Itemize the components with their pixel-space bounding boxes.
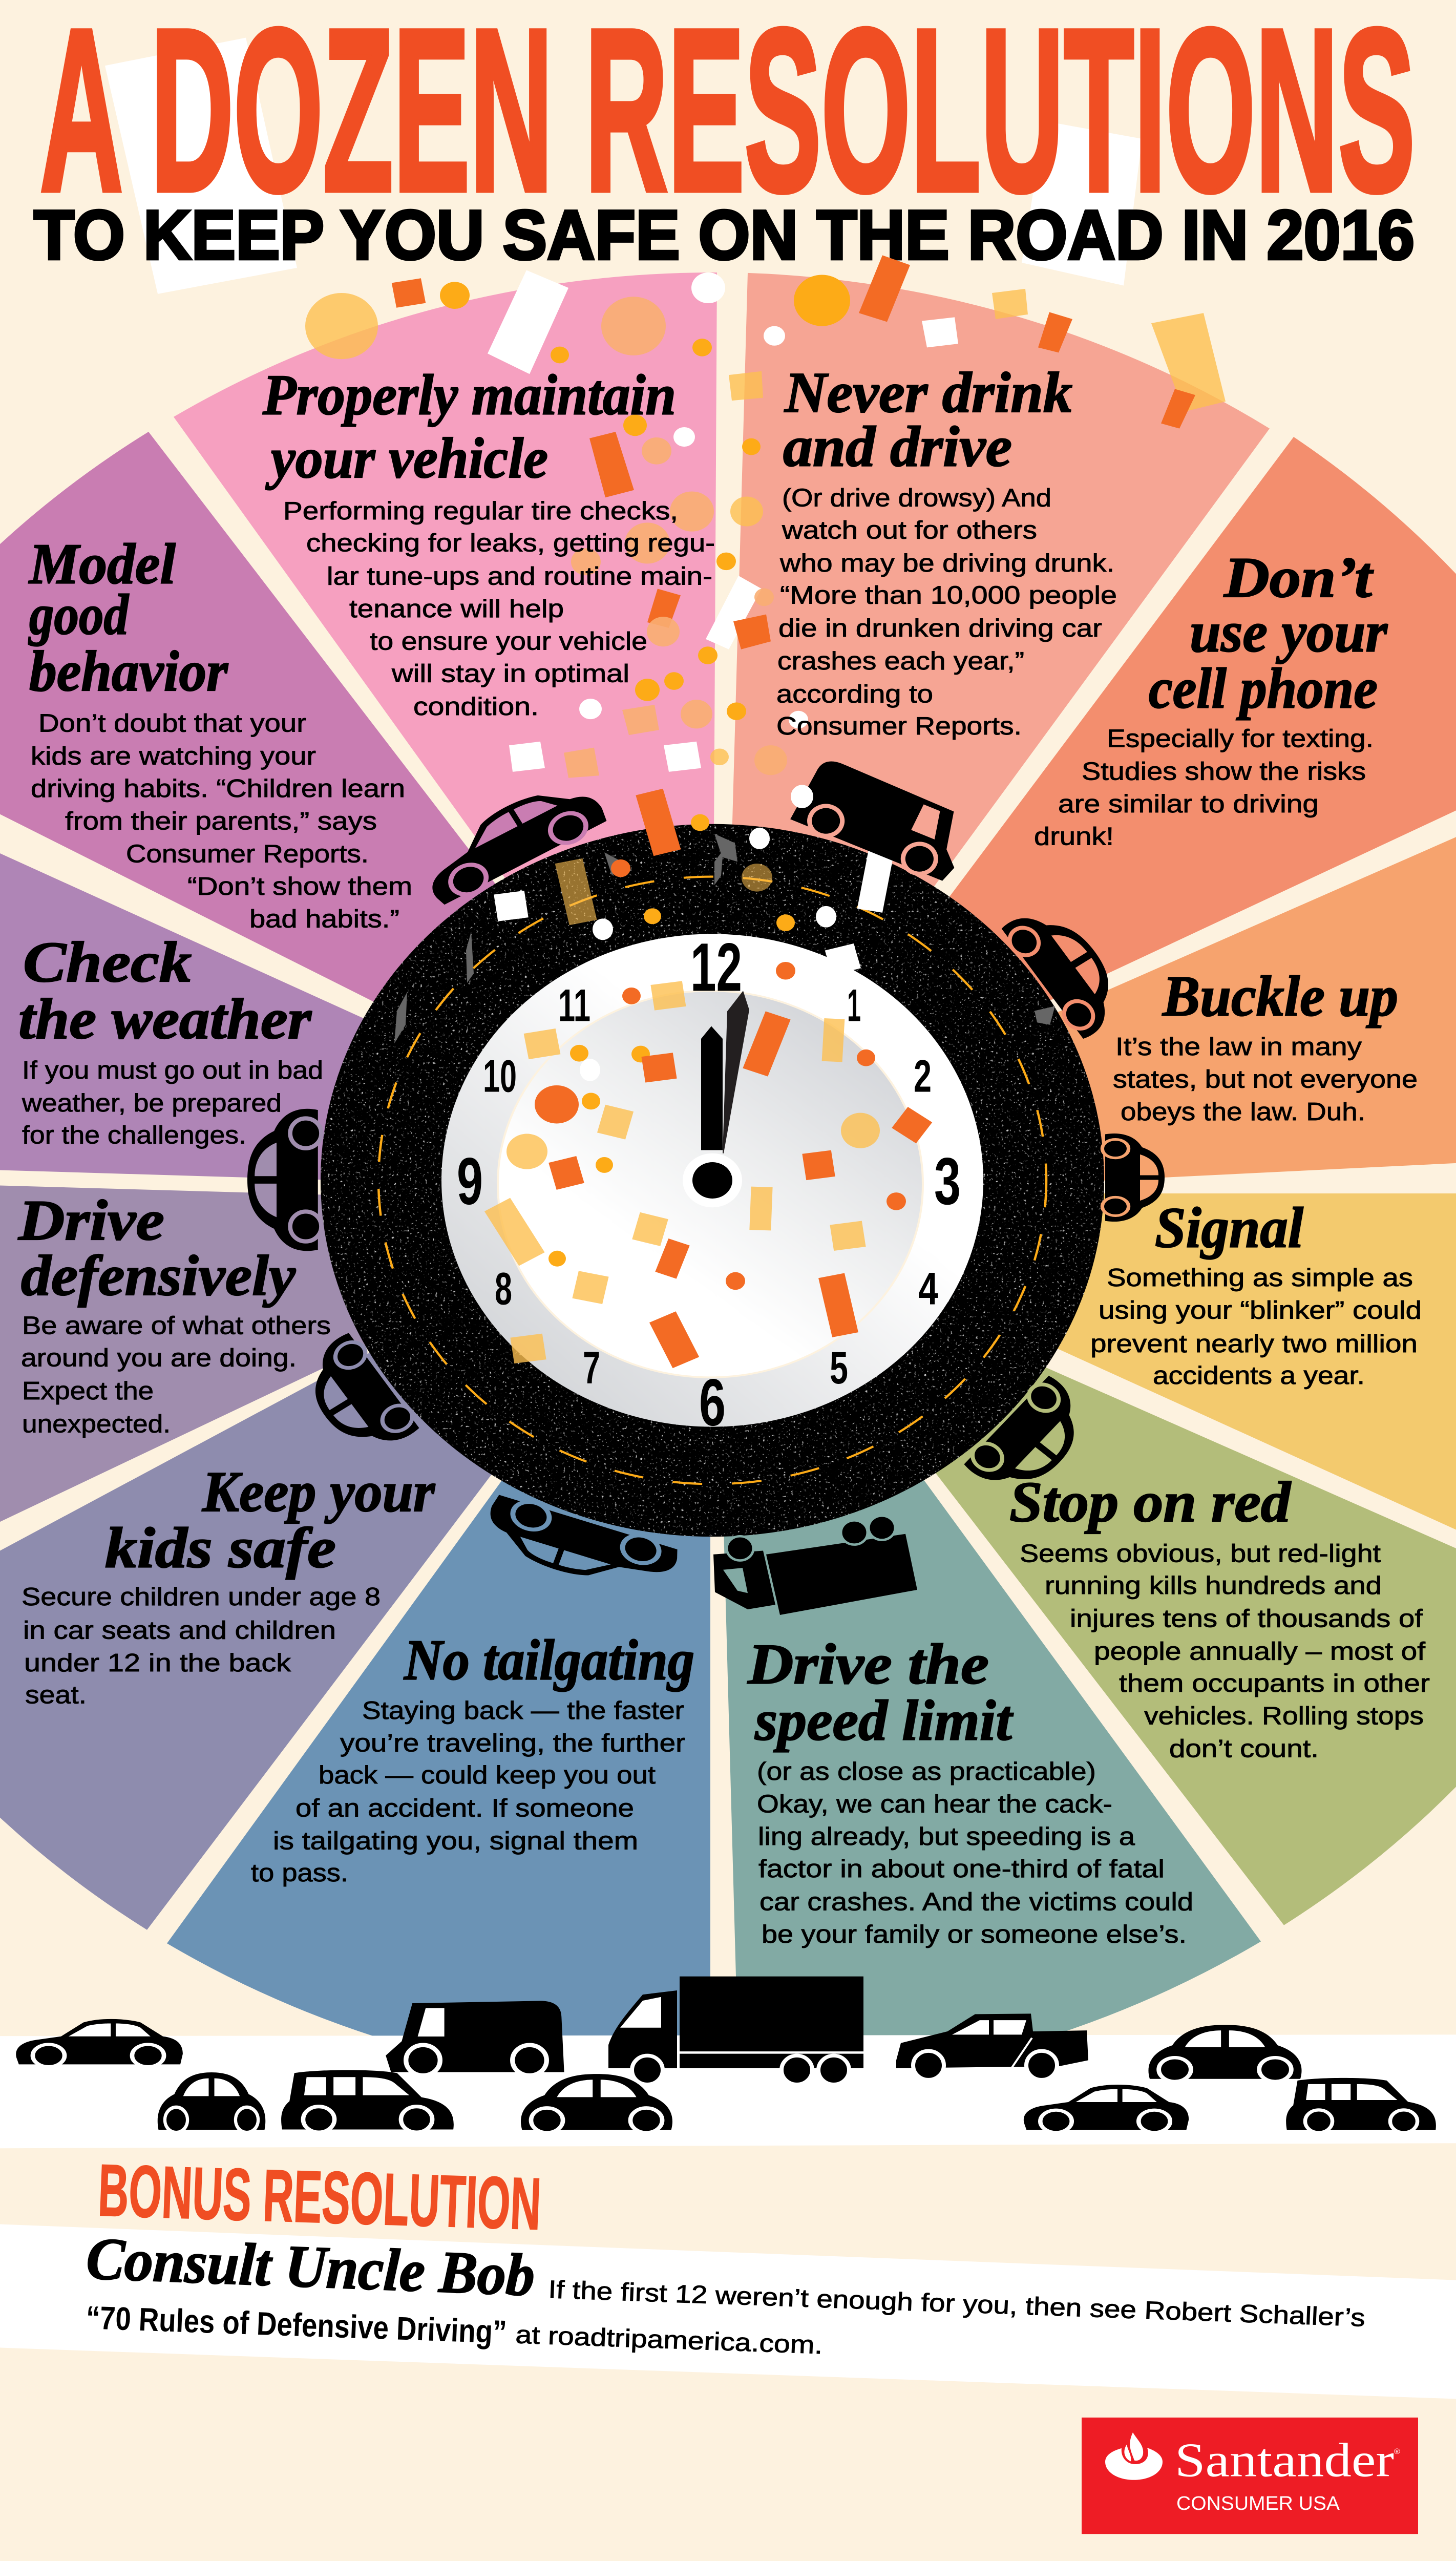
clock numerals: 9 <box>457 1144 483 1218</box>
panel: don't use your cell phone <box>1034 545 1388 850</box>
bonus resolution heading: BONUS RESOLUTION <box>97 2149 542 2245</box>
icon: box truck <box>608 1977 863 2085</box>
wedge: never drink and drive <box>729 273 1270 932</box>
panel: check the weather <box>18 930 323 1149</box>
body text: Staying back — the faster <box>362 1696 684 1724</box>
clock numerals: 8 <box>495 1263 512 1314</box>
wedge: stop on red <box>901 1347 1456 1925</box>
body text <box>1090 1263 1422 1389</box>
clock face <box>441 934 983 1427</box>
body text: them occupants in other <box>1119 1669 1430 1697</box>
bonus text: “70 Rules of Defensive Driving” <box>85 2299 508 2350</box>
heading <box>18 1188 296 1308</box>
icon: sedan <box>16 2019 183 2067</box>
wedge: maintain your vehicle <box>174 272 717 932</box>
body text: don’t count. <box>1169 1734 1319 1762</box>
wedge: no tailgating <box>167 1421 710 2089</box>
body text: Seems obvious, but red-light <box>1020 1539 1381 1567</box>
body text: from their parents,” says <box>65 807 377 835</box>
clock numerals: 1 <box>847 980 861 1031</box>
clock numerals: 5 <box>830 1342 848 1393</box>
body text: you’re traveling, the further <box>340 1729 685 1757</box>
panel: no tailgating <box>251 1628 694 1887</box>
heading: Check <box>23 930 192 994</box>
bonus text: If the first 12 weren’t enough for you, then see Robert Schaller’s <box>548 2275 1366 2332</box>
body text: bad habits.” <box>249 905 399 933</box>
body text: watch out for others <box>782 516 1037 544</box>
clock numerals: 7 <box>583 1342 600 1393</box>
body text: is tailgating you, signal them <box>273 1827 638 1855</box>
body text: will stay in optimal <box>391 659 629 687</box>
bonus heading: consult uncle bob: Consult Uncle Bob <box>85 2226 536 2308</box>
icon: white confetti on van <box>791 785 813 808</box>
body text <box>1020 1539 1430 1762</box>
heading <box>18 930 312 1051</box>
icon: SUV <box>281 2070 454 2132</box>
bonus white band <box>0 2224 1456 2399</box>
body text: using your “blinker” could <box>1099 1296 1422 1324</box>
icon: small car, buckle up <box>1102 1133 1165 1222</box>
title backing shapes <box>105 38 1142 294</box>
white road band <box>0 2034 1456 2148</box>
heading <box>1149 545 1388 720</box>
body text: in car seats and children <box>23 1616 336 1644</box>
body text: to pass. <box>251 1858 348 1887</box>
body text: checking for leaks, getting regu- <box>306 529 715 557</box>
heading: Buckle up <box>1162 964 1398 1028</box>
body text: drunk! <box>1034 822 1114 850</box>
body text: It’s the law in many <box>1115 1032 1362 1060</box>
wordmark: Santander <box>1175 2433 1394 2487</box>
body text: back — could keep you out <box>319 1760 656 1789</box>
wedge: buckle up <box>1045 837 1456 1183</box>
confetti <box>305 255 1226 1368</box>
body text: states, but not everyone <box>1113 1065 1418 1093</box>
body text: driving habits. “Children learn <box>31 774 405 802</box>
clock numerals: 6 <box>699 1365 726 1439</box>
body text: tenance will help <box>349 594 564 622</box>
icon: pickup <box>896 2013 1088 2080</box>
body text: kids are watching your <box>31 742 316 770</box>
bonus text: at roadtripamerica.com. <box>515 2320 823 2359</box>
heading: Don’t <box>1223 545 1374 610</box>
body text: running kills hundreds and <box>1045 1571 1382 1600</box>
heading: defensively <box>21 1243 296 1308</box>
body text <box>251 1696 685 1887</box>
body text: Something as simple as <box>1107 1263 1413 1291</box>
heading: cell phone <box>1149 656 1378 720</box>
icon: hatchback on road <box>998 896 1136 1041</box>
heading: speed limit <box>754 1688 1014 1752</box>
body text: Consumer Reports. <box>776 711 1022 740</box>
panel: model good behavior <box>28 532 412 933</box>
icon: compact right <box>1148 2025 1302 2082</box>
wedge: speed limit <box>720 1397 1261 2089</box>
icon: hatchback <box>158 2072 265 2133</box>
wedge: drive defensively <box>0 1185 410 1522</box>
body text: prevent nearly two million <box>1090 1329 1418 1358</box>
body text <box>1113 1032 1418 1126</box>
wedge: signal <box>999 1193 1456 1530</box>
body text: vehicles. Rolling stops <box>1144 1702 1424 1730</box>
heading <box>105 1459 435 1580</box>
body text: people annually – most of <box>1094 1637 1426 1665</box>
icon: truck upside down <box>713 1516 917 1615</box>
body text: Studies show the risks <box>1082 757 1366 785</box>
heading: Signal <box>1155 1195 1303 1259</box>
traffic row of vehicles <box>16 1977 1436 2133</box>
heading: Drive <box>18 1188 164 1252</box>
wedge: cell phone <box>935 437 1456 1003</box>
panel: keep your kids safe <box>22 1459 435 1709</box>
clock numerals: 3 <box>934 1144 961 1218</box>
heading: No tailgating <box>403 1628 694 1692</box>
heading: Model <box>28 532 176 596</box>
heading: Properly maintain <box>262 363 676 427</box>
heading: kids safe <box>105 1515 336 1580</box>
panel: never drink and drive <box>776 360 1117 740</box>
body text: factor in about one-third of fatal <box>758 1854 1165 1882</box>
heading <box>28 532 228 703</box>
icon: car on road, model behavior <box>410 770 611 909</box>
clock hands <box>683 991 749 1207</box>
clock numerals <box>457 929 961 1439</box>
sub brand: CONSUMER USA <box>1176 2492 1340 2514</box>
wheel of twelve wedges <box>0 272 1456 2089</box>
body text: be your family or someone else’s. <box>762 1920 1187 1948</box>
clock numerals: 4 <box>918 1263 938 1314</box>
icon: SUV right <box>1286 2078 1436 2133</box>
clock numerals: 12 <box>690 929 742 1005</box>
heading: Drive the <box>747 1632 989 1696</box>
body text: who may be driving drunk. <box>779 549 1114 577</box>
body text: condition. <box>413 692 539 720</box>
heading: use your <box>1190 600 1388 664</box>
clock numerals: 11 <box>558 980 590 1031</box>
body text: lar tune-ups and routine main- <box>327 562 712 590</box>
heading: Never drink <box>784 360 1072 425</box>
body text: for the challenges. <box>22 1121 246 1149</box>
body text: Secure children under age 8 <box>22 1582 381 1610</box>
panel: drive the speed limit <box>747 1632 1193 1948</box>
icon: flame <box>1105 2432 1163 2480</box>
heading: your vehicle <box>265 426 548 490</box>
body text: are similar to driving <box>1058 789 1319 817</box>
body text: Performing regular tire checks, <box>283 496 678 524</box>
heading <box>262 363 676 490</box>
wedge: check the weather <box>0 853 435 1181</box>
body text: around you are doing. <box>21 1344 297 1372</box>
body text: under 12 in the back <box>24 1648 291 1676</box>
icon: car, drive defensively <box>247 1109 321 1251</box>
body text: Don’t doubt that your <box>38 709 306 737</box>
heading: Stop on red <box>1009 1470 1292 1534</box>
panel: signal <box>1090 1195 1422 1389</box>
body text <box>757 1757 1193 1948</box>
panel: drive defensively <box>18 1188 331 1438</box>
icon: van on road <box>789 755 978 886</box>
body text <box>21 1311 331 1438</box>
asphalt road ring <box>321 824 1104 1537</box>
icon: car upside down, no tailgating <box>477 1491 682 1602</box>
icon: sedan right <box>1024 2085 1189 2132</box>
heading: good <box>28 582 129 646</box>
body text: accidents a year. <box>1153 1361 1365 1389</box>
body text: (or as close as practicable) <box>757 1757 1096 1785</box>
body text <box>283 496 715 720</box>
body text: ling already, but speeding is a <box>758 1822 1135 1851</box>
registered mark: ® <box>1394 2447 1401 2456</box>
heading: behavior <box>29 639 228 703</box>
body text: unexpected. <box>22 1410 171 1438</box>
body text: Okay, we can hear the cack- <box>757 1790 1112 1818</box>
body text: to ensure your vehicle <box>370 627 647 655</box>
heading: the weather <box>18 986 312 1051</box>
panel: buckle up <box>1113 964 1418 1126</box>
body text: Consumer Reports. <box>126 839 369 868</box>
heading <box>747 1632 1014 1752</box>
heading: Keep your <box>202 1459 435 1524</box>
body text <box>22 1056 323 1149</box>
body text: crashes each year,” <box>777 646 1024 675</box>
icon: car, stop on red <box>961 1373 1103 1507</box>
body text: If you must go out in bad <box>22 1056 323 1084</box>
body text <box>22 1582 381 1709</box>
icon: car, keep kids safe <box>290 1331 423 1465</box>
panel: stop on red <box>1009 1470 1430 1762</box>
Santander logo <box>1082 2418 1418 2534</box>
body text: obeys the law. Duh. <box>1121 1097 1365 1126</box>
body text: of an accident. If someone <box>296 1794 634 1822</box>
heading: and drive <box>783 414 1012 478</box>
body text: “More than 10,000 people <box>780 581 1117 609</box>
body text: seat. <box>25 1681 87 1709</box>
panel: properly maintain your vehicle <box>262 363 715 720</box>
clock numerals: 2 <box>914 1051 932 1102</box>
icon: compact car <box>521 2074 672 2133</box>
heading <box>783 360 1072 478</box>
body text <box>776 484 1117 740</box>
icon: van <box>386 2001 564 2075</box>
clock <box>441 929 983 1439</box>
body text: “Don’t show them <box>187 872 412 900</box>
wedge: keep kids safe <box>0 1331 522 1930</box>
body text: according to <box>776 680 933 708</box>
body text <box>31 709 412 933</box>
clock numerals: 10 <box>483 1051 517 1102</box>
body text: Expect the <box>22 1376 154 1404</box>
body text: car crashes. And the victims could <box>759 1887 1193 1916</box>
body text: Especially for texting. <box>1107 724 1374 752</box>
body text <box>1034 724 1374 850</box>
bonus text <box>85 2275 1366 2359</box>
wedge: model good behavior <box>0 432 522 1033</box>
body text: Be aware of what others <box>22 1311 331 1339</box>
body text: weather, be prepared <box>22 1088 282 1117</box>
body text: die in drunken driving car <box>778 614 1102 642</box>
body text: (Or drive drowsy) And <box>782 484 1051 512</box>
body text: injures tens of thousands of <box>1070 1604 1423 1632</box>
